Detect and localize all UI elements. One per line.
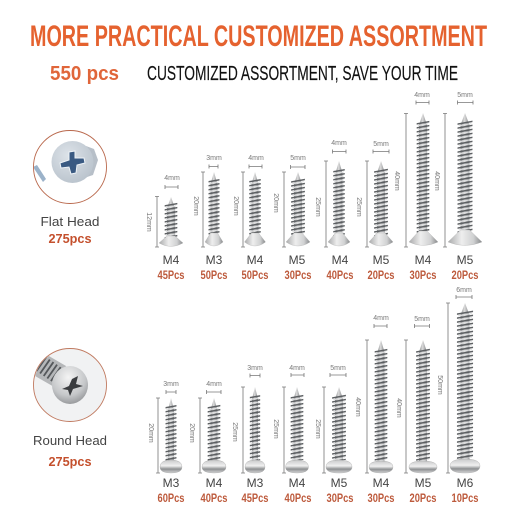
column: round M6 50mm: 50mm — [436, 375, 443, 395]
column: flat M5 40mm: 5mm — [457, 92, 473, 99]
column: round M4 25mm — [272, 365, 312, 505]
column: round M5 40mm: 5mm — [414, 316, 430, 323]
column: flat M5 25mm: 5mm — [373, 141, 389, 148]
column: round M5 25mm: M5 — [331, 476, 348, 490]
column: round M4 20mm: M4 — [206, 476, 223, 490]
column: round M3 25mm: 45Pcs — [242, 493, 268, 505]
column: flat M4 20mm: M4 — [247, 253, 264, 267]
column: round M6 50mm: 10Pcs — [452, 493, 478, 505]
column: flat M5 20mm — [272, 155, 312, 282]
column: flat M5 40mm: 20Pcs — [452, 270, 478, 282]
total count: 550 pcs — [50, 63, 119, 85]
column: round M5 25mm: 30Pcs — [326, 493, 354, 505]
column: round M4 40mm: 4mm — [373, 315, 389, 322]
column: round M5 40mm: 40mm — [395, 398, 402, 418]
column: round M4 25mm: M4 — [289, 476, 306, 490]
column: round M4 20mm — [188, 381, 228, 505]
column: flat M4 12mm: M4 — [163, 253, 180, 267]
column: flat M4 25mm — [314, 140, 354, 282]
column: flat M4 40mm — [393, 92, 438, 282]
column: flat M4 40mm: M4 — [415, 253, 432, 267]
column: round M3 25mm: 3mm — [247, 365, 263, 372]
column: round M6 50mm — [436, 287, 480, 505]
column: flat M4 40mm: 40mm — [393, 171, 400, 191]
column: round M5 25mm: 25mm — [314, 419, 321, 439]
column: flat M5 25mm: M5 — [373, 253, 390, 267]
column: round M3 25mm — [231, 365, 268, 505]
column: flat M5 25mm — [355, 141, 394, 282]
column: flat M5 20mm: 5mm — [290, 155, 306, 162]
column: round M4 20mm: 20mm — [188, 423, 195, 443]
column: flat M4 20mm — [232, 155, 268, 282]
column: flat M5 25mm: 20Pcs — [368, 270, 394, 282]
column: round M3 20mm: 3mm — [163, 381, 179, 388]
column: round M4 40mm: 40mm — [354, 397, 361, 417]
column: flat M4 20mm: 4mm — [248, 155, 264, 162]
column: round M3 20mm: M3 — [163, 476, 180, 490]
column: flat M4 25mm: 40Pcs — [326, 270, 354, 282]
column: round M3 20mm — [147, 381, 184, 505]
column: round M4 20mm: 40Pcs — [200, 493, 228, 505]
column: round M5 25mm — [314, 365, 354, 505]
column: flat M4 12mm: 4mm — [164, 175, 180, 182]
column: round M3 20mm: 60Pcs — [158, 493, 184, 505]
label: round head: Round Head — [33, 434, 107, 448]
column: round M5 25mm: 5mm — [330, 365, 346, 372]
icon: flat head screw close-up — [33, 130, 106, 204]
column: flat M3 20mm: 3mm — [206, 155, 222, 162]
column: flat M4 20mm: 20mm — [232, 196, 239, 216]
column: flat M4 12mm — [145, 175, 184, 282]
column: round M4 40mm: 30Pcs — [368, 493, 394, 505]
column: round M3 25mm: 25mm — [231, 422, 238, 442]
column: round M5 40mm: 20Pcs — [410, 493, 436, 505]
column: round M4 40mm: M4 — [373, 476, 390, 490]
column: flat M4 25mm: M4 — [332, 253, 349, 267]
panel: flat head category — [33, 130, 106, 246]
column: flat M3 20mm: 20mm — [192, 196, 199, 216]
column: round M3 25mm: M3 — [247, 476, 264, 490]
column: round M4 25mm: 25mm — [272, 419, 279, 439]
column: round M4 25mm: 40Pcs — [284, 493, 312, 505]
column: flat M4 20mm: 50Pcs — [242, 270, 268, 282]
column: round M6 50mm: M6 — [457, 476, 474, 490]
column: flat M5 40mm — [433, 92, 482, 282]
column: round M4 25mm: 4mm — [289, 365, 305, 372]
count: round head: 275pcs — [48, 455, 92, 469]
column: flat M4 40mm: 4mm — [414, 92, 430, 99]
column: flat M4 12mm: 12mm — [145, 212, 152, 232]
column: round M6 50mm: 6mm — [456, 287, 472, 294]
column: round M4 20mm: 4mm — [206, 381, 222, 388]
column: flat M5 20mm: 30Pcs — [284, 270, 312, 282]
column: flat M5 40mm: 40mm — [433, 171, 440, 191]
column: flat M4 40mm: 30Pcs — [410, 270, 436, 282]
column: flat M4 25mm: 25mm — [314, 197, 321, 217]
column: flat M5 40mm: M5 — [457, 253, 474, 267]
column: flat M4 12mm: 45Pcs — [158, 270, 184, 282]
column: flat M4 25mm: 4mm — [331, 140, 347, 147]
column: flat M5 20mm: M5 — [289, 253, 306, 267]
column: round M5 40mm: M5 — [415, 476, 432, 490]
count: flat head: 275pcs — [48, 232, 92, 246]
column: round M5 40mm — [395, 316, 437, 505]
column: flat M3 20mm — [192, 155, 228, 282]
icon: round head screw close-up — [28, 348, 106, 422]
column: flat M3 20mm: 50Pcs — [200, 270, 228, 282]
column: flat M5 25mm: 25mm — [355, 197, 362, 217]
column: round M3 20mm: 20mm — [147, 423, 154, 443]
column: flat M5 20mm: 20mm — [272, 193, 279, 213]
panel: round head category — [28, 348, 107, 469]
column: round M4 40mm — [354, 315, 394, 505]
label: flat head: Flat Head — [40, 215, 100, 229]
column: flat M3 20mm: M3 — [206, 253, 223, 267]
